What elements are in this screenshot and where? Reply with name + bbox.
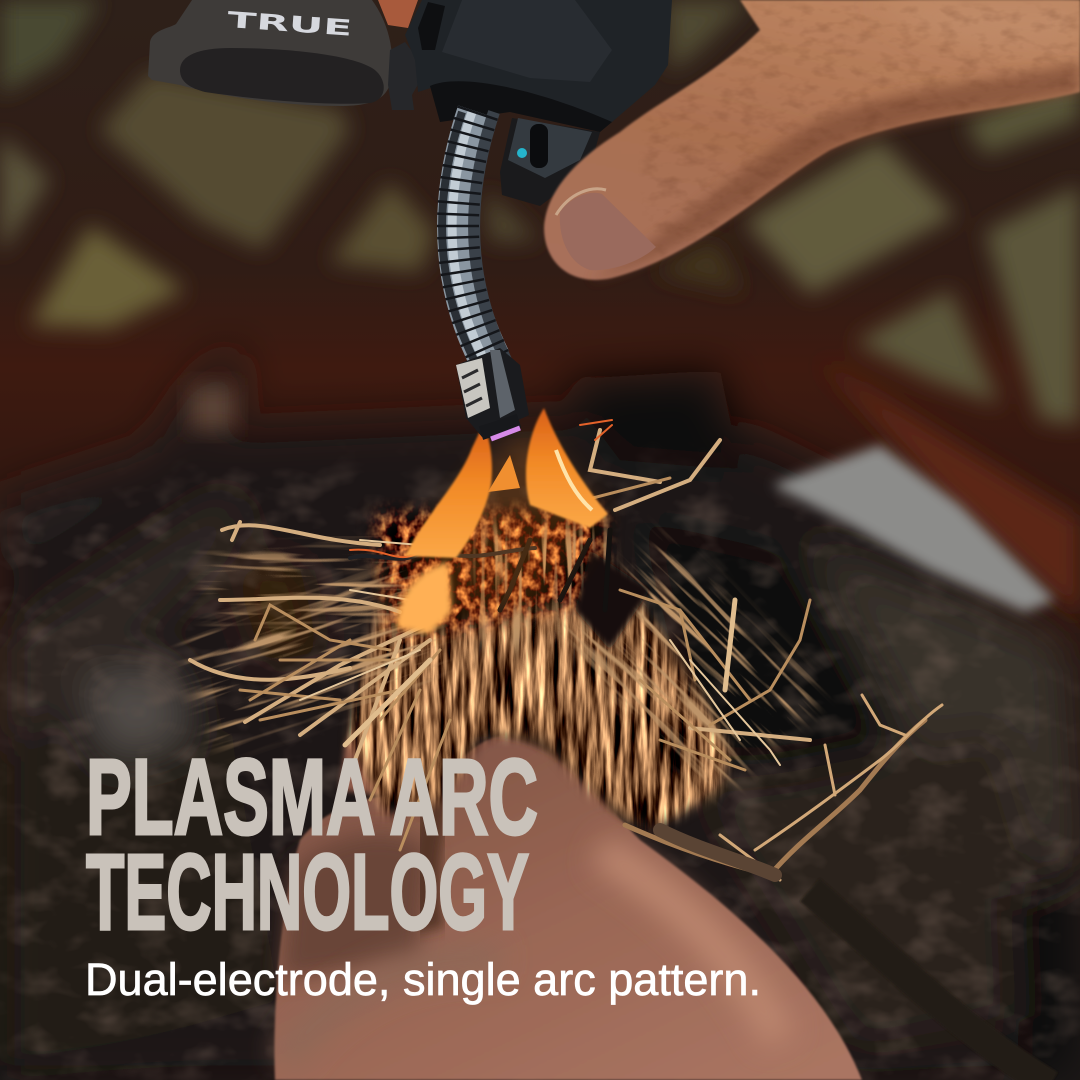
log, lower right xyxy=(810,890,1050,1080)
lower hand holding the tinder xyxy=(274,705,862,1080)
lighter hinge xyxy=(388,42,426,110)
lighter body xyxy=(405,0,672,132)
tuft: lower left xyxy=(184,566,446,744)
flame xyxy=(395,408,608,634)
USB charging port xyxy=(500,118,600,206)
headline: PLASMA ARC xyxy=(86,736,538,857)
tuft: upper left xyxy=(210,550,410,620)
blurred grey rock xyxy=(772,445,1055,612)
brand mark: TRUE xyxy=(227,8,353,42)
lighter protective cap xyxy=(148,0,392,106)
upper hand pressing the lighter xyxy=(544,0,1080,280)
electrode head xyxy=(456,348,529,440)
blue status LED xyxy=(517,148,527,158)
fibres rising into the burnt area xyxy=(480,525,610,655)
headline xyxy=(86,736,538,952)
purple plasma arc xyxy=(491,428,520,439)
flexible neck xyxy=(442,112,506,360)
subheading: Dual-electrode, single arc pattern. xyxy=(85,954,761,1005)
tinder bundle xyxy=(184,420,942,880)
tuft: right xyxy=(563,538,817,792)
upper fingers: thumb behind device xyxy=(378,0,418,28)
headline: TECHNOLOGY xyxy=(86,831,529,952)
thumbnail xyxy=(560,193,656,270)
